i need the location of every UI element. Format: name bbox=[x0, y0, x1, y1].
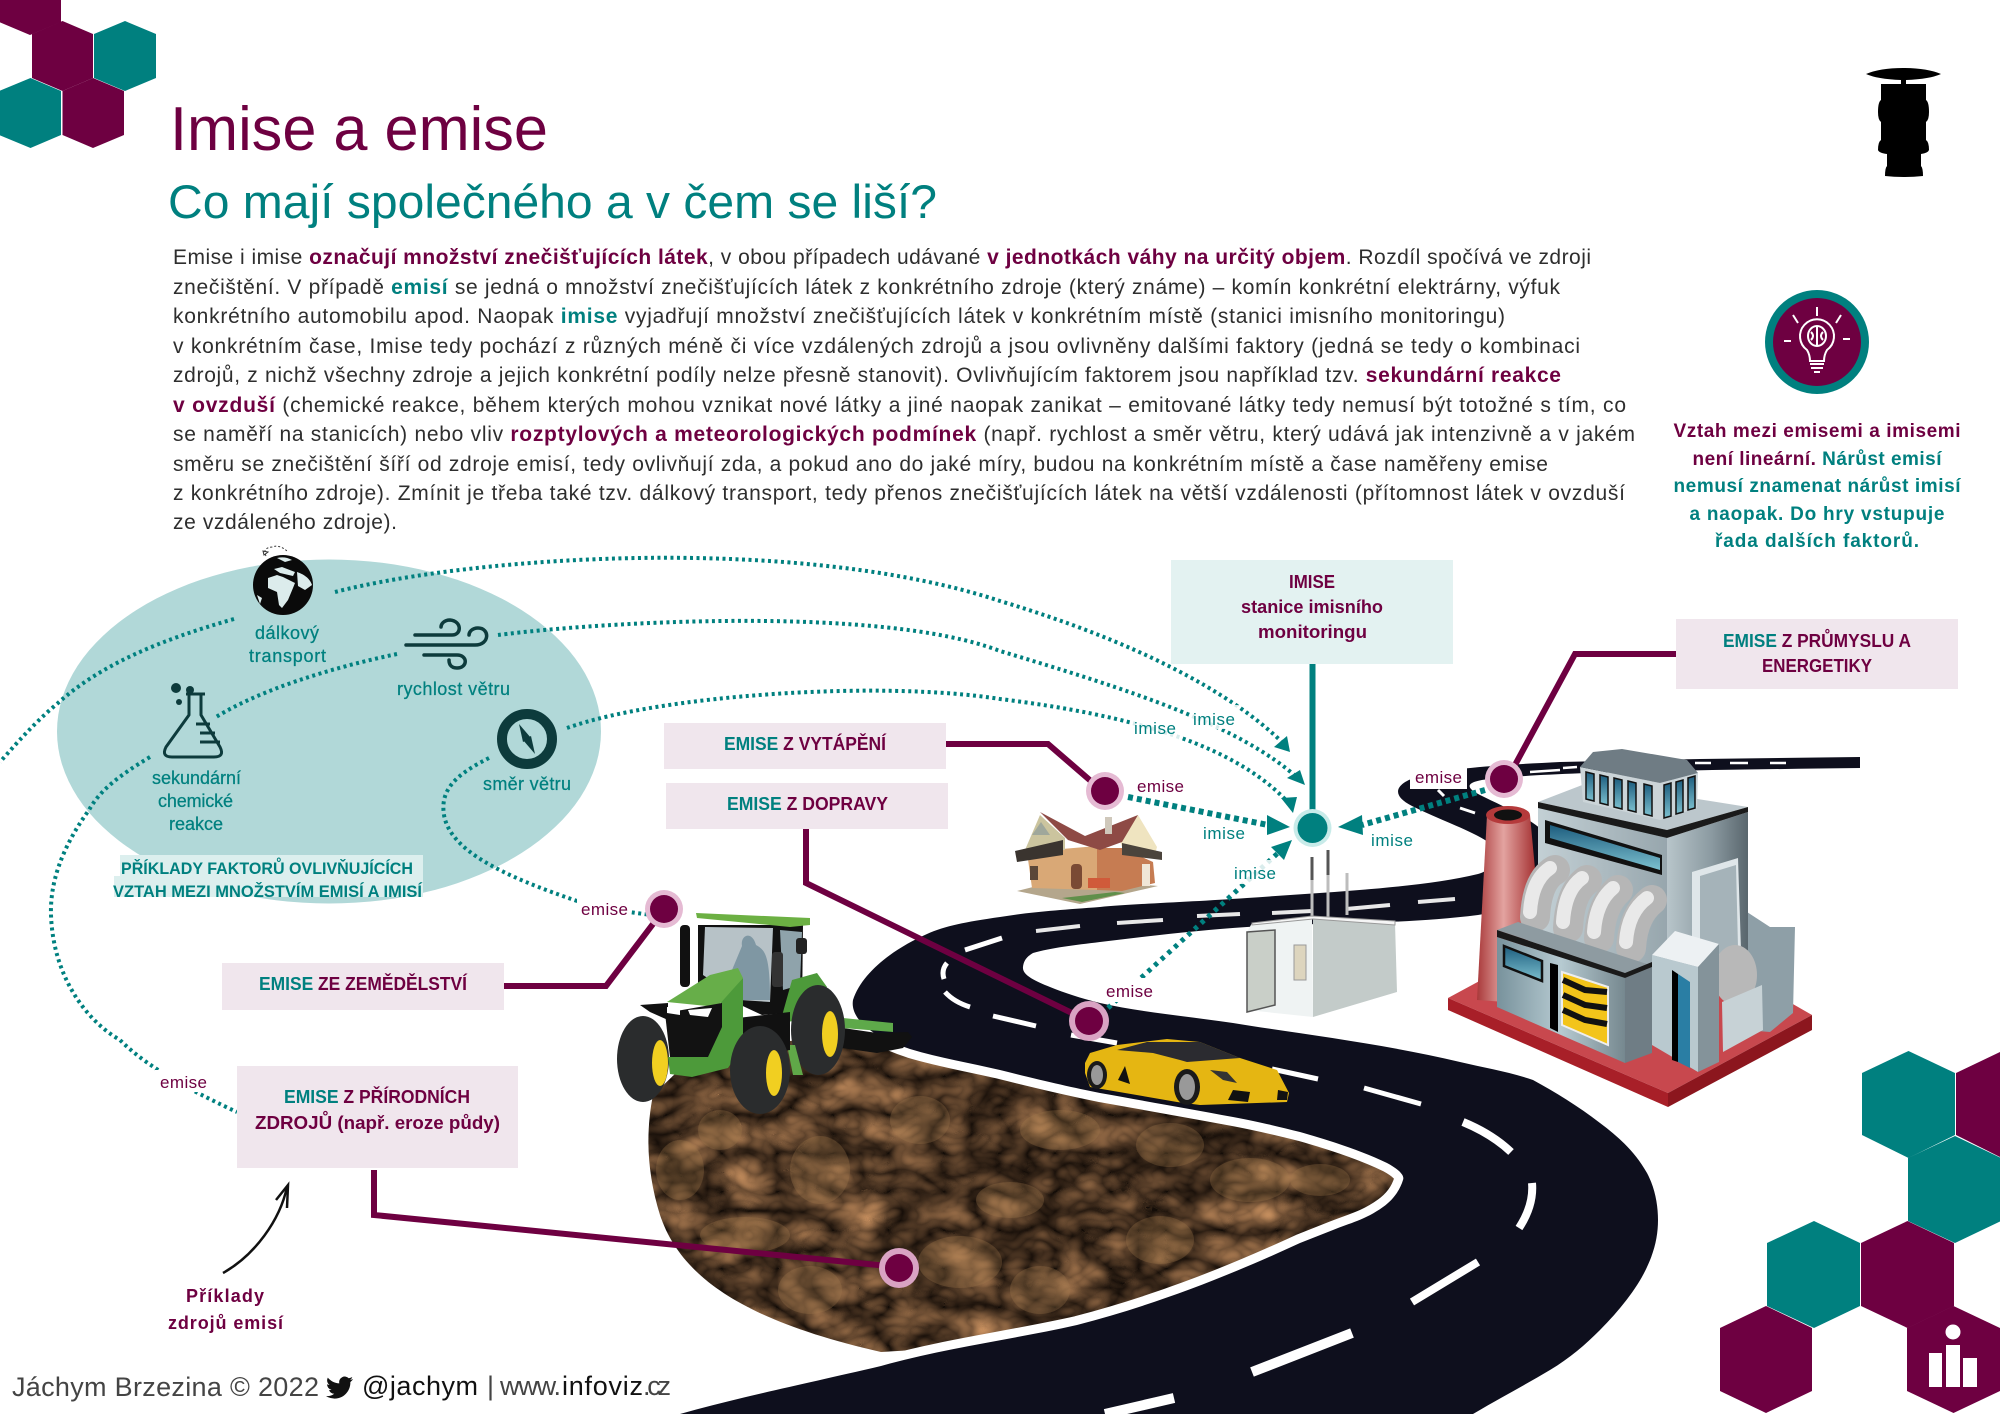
body text: ze vzdáleného zdroje). bbox=[173, 511, 397, 534]
body text bbox=[173, 246, 1635, 534]
door bbox=[1562, 972, 1608, 1045]
label: secondary reactions bbox=[152, 768, 241, 834]
label: secondary reactions: chemické bbox=[158, 791, 233, 811]
connector: agriculture bbox=[504, 920, 656, 986]
illustration: tractor bbox=[617, 913, 912, 1114]
caption: factors bbox=[113, 855, 423, 901]
callout: non-linear relation: nemusí znamenat nárůst imisí bbox=[1674, 476, 1961, 497]
box: industry emissions bbox=[1676, 619, 1958, 689]
body text: z konkrétního zdroje). Zmínit je třeba také tzv. dálkový transport, tedy přenos znečišťujících látek na větší vzdálenosti (přítomnost látek v ovzduší bbox=[173, 482, 1625, 505]
caption: factors: PŘÍKLADY FAKTORŮ OVLIVŇUJÍCÍCH bbox=[121, 858, 413, 878]
box: natural source emissions: ZDROJŮ (např. eroze půdy) bbox=[255, 1111, 500, 1133]
box: transport emissions bbox=[666, 783, 948, 829]
box: IMISE station: IMISE bbox=[1289, 572, 1335, 592]
body text: v konkrétním čase, Imise tedy pochází z různých méně či více vzdálených zdrojů a jsou ovlivněny dalšími faktory (jedná se tedy o kombinaci bbox=[173, 335, 1580, 358]
footer credit: @jachym bbox=[362, 1371, 478, 1401]
path: wind speed to station bbox=[498, 621, 1300, 780]
station connector bbox=[1310, 664, 1316, 815]
body text: v ovzduší (chemické reakce, během kterých mohou vznikat nové látky a jiné naopak zanikat – emitované látky tedy nemusí být totožné s tím, co bbox=[173, 394, 1626, 417]
label: wind direction: směr větru bbox=[483, 774, 571, 794]
callout: non-linear relation bbox=[1674, 421, 1961, 552]
marker: industry bbox=[1485, 760, 1523, 798]
body text: konkrétního automobilu apod. Naopak imise vyjadřují množství znečišťujících látek v konkrétním místě (stanici imisního monitoringu) bbox=[173, 305, 1505, 328]
arrowheads into station bbox=[1267, 736, 1363, 860]
illustration: car bbox=[1085, 1039, 1289, 1105]
body text: zdrojů, z nichž všechny zdroje a jejich konkrétní podíly nelze přesně stanovit). Ovlivňujícím faktorem jsou například tzv. sekundární reakce bbox=[173, 364, 1561, 387]
icon: flask bbox=[164, 683, 222, 757]
tall panel bbox=[1692, 858, 1741, 965]
title: Imise a emise bbox=[170, 95, 548, 164]
factory base bbox=[1448, 905, 1812, 1107]
path: wind direction to farm bbox=[443, 758, 651, 915]
marker: agriculture bbox=[645, 890, 683, 928]
labels: immission tags bbox=[1132, 705, 1413, 884]
box: industry emissions: ENERGETIKY bbox=[1762, 656, 1872, 676]
label: examples of emission sources bbox=[168, 1286, 284, 1333]
box: heating emissions bbox=[664, 723, 946, 769]
footer credit bbox=[12, 1371, 671, 1402]
box: natural source emissions bbox=[237, 1066, 518, 1168]
labels: emission tags: emise bbox=[1415, 768, 1462, 787]
road illustration bbox=[640, 757, 1860, 1414]
label: long-range transport: transport bbox=[249, 646, 326, 666]
icon: compass bbox=[502, 714, 552, 764]
icon: light bulb with brain bbox=[1765, 290, 1869, 394]
chimney bbox=[1477, 806, 1536, 1003]
labels: immission tags: imise bbox=[1203, 824, 1245, 843]
box: IMISE station: stanice imisního bbox=[1241, 597, 1383, 617]
illustration: factory bbox=[1448, 749, 1812, 1107]
box: agriculture emissions bbox=[222, 963, 504, 1010]
callout: non-linear relation: Vztah mezi emisemi a imisemi bbox=[1674, 421, 1960, 442]
marker: transport bbox=[1069, 1001, 1109, 1041]
footer credit: Jáchym Brzezina © 2022 bbox=[12, 1372, 319, 1402]
label: secondary reactions: sekundární bbox=[152, 768, 241, 788]
path: secondary reactions to natural sources bbox=[51, 757, 237, 1112]
icon: chimney silhouette bbox=[1866, 68, 1941, 177]
labels: emission tags: emise bbox=[1106, 982, 1153, 1001]
marker: heating bbox=[1086, 772, 1124, 810]
decorative hexagons bottom right bbox=[1720, 1051, 2000, 1413]
caption: factors: VZTAH MEZI MNOŽSTVÍM EMISÍ A IMISÍ bbox=[113, 882, 423, 901]
footer credit: | bbox=[487, 1371, 494, 1401]
label: examples of emission sources: Příklady bbox=[186, 1286, 264, 1306]
connector: transport bbox=[806, 829, 1080, 1017]
low box bbox=[1722, 985, 1763, 1052]
emission arrows bbox=[1108, 790, 1485, 1008]
footer credit: www. bbox=[499, 1371, 561, 1401]
back right block bbox=[1745, 912, 1795, 1032]
road surface bbox=[680, 757, 1860, 1414]
box: agriculture emissions: EMISE ZE ZEMĚDĚLSTVÍ bbox=[259, 973, 468, 994]
body text: znečištění. V případě emisí se jedná o množství znečišťujících látek z konkrétního zdroje (který známe) – komín konkrétní elektrárny, výfuk bbox=[173, 276, 1560, 299]
label: examples of emission sources: zdrojů emisí bbox=[168, 1313, 284, 1333]
labels: emission tags bbox=[155, 763, 1467, 1092]
window strip bbox=[1545, 820, 1662, 875]
connector: natural bbox=[374, 1170, 888, 1266]
body text: směru se znečištění šíří od zdroje emisí, tedy ovlivňují zda, a pokud ano do jaké míry, budou na konkrétním místě a čase naměřeny emise bbox=[173, 453, 1548, 476]
callout: non-linear relation: a naopak. Do hry vstupuje bbox=[1690, 504, 1944, 525]
decorative hexagons top left bbox=[0, 0, 156, 148]
connector: heating bbox=[946, 744, 1092, 782]
labels: immission tags: imise bbox=[1234, 864, 1276, 883]
box: industry emissions: EMISE Z PRŮMYSLU A bbox=[1723, 629, 1911, 651]
main tower bbox=[1538, 806, 1667, 1000]
box: IMISE station: monitoringu bbox=[1258, 622, 1367, 642]
dotted factor paths bbox=[0, 558, 1300, 1112]
icon: wind bbox=[406, 620, 487, 668]
lower block bbox=[1497, 937, 1625, 1063]
illustration: monitoring station bbox=[1247, 850, 1397, 1017]
body text: Emise i imise označují množství znečišťujících látek, v obou případech udávané v jednotkách váhy na určitý objem. Rozdíl spočívá ve zdroji bbox=[173, 246, 1591, 269]
callout: non-linear relation: není lineární. Nárůst emisí bbox=[1692, 449, 1942, 470]
icon: globe bbox=[253, 546, 313, 615]
arrow: to emission sources bbox=[223, 1185, 288, 1273]
footer credit: infoviz bbox=[562, 1371, 643, 1401]
panel: factors ellipse bbox=[57, 560, 601, 904]
labels: emission tags: emise bbox=[160, 1073, 207, 1092]
subtitle: Co mají společného a v čem se liší? bbox=[168, 175, 937, 228]
icon: twitter bird bbox=[326, 1377, 353, 1399]
icon: infoviz logo bbox=[1929, 1324, 1977, 1387]
road dashes bbox=[943, 763, 1786, 1414]
footer credit: .cz bbox=[643, 1371, 671, 1401]
path: long-range transport to station bbox=[335, 558, 1285, 745]
connector: industry bbox=[1515, 654, 1676, 765]
box: transport emissions: EMISE Z DOPRAVY bbox=[727, 794, 888, 814]
front tower bbox=[1652, 931, 1719, 967]
labels: emission tags: emise bbox=[1137, 777, 1184, 796]
labels: immission tags: imise bbox=[1193, 710, 1235, 729]
body text: se naměří na stanicích) nebo vliv rozptylových a meteorologických podmínek (např. rychlost a směr větru, který udává jak intenzivně a v jakém bbox=[173, 423, 1635, 446]
label: long-range transport: dálkový bbox=[255, 623, 319, 643]
label: secondary reactions: reakce bbox=[169, 814, 223, 834]
small dome bbox=[1713, 945, 1757, 1005]
illustration: house bbox=[1015, 812, 1162, 904]
labels: immission tags: imise bbox=[1134, 719, 1176, 738]
marker: soil bbox=[879, 1248, 919, 1288]
labels: immission tags: imise bbox=[1371, 831, 1413, 850]
box: heating emissions: EMISE Z VYTÁPĚNÍ bbox=[724, 733, 887, 754]
labels: emission tags: emise bbox=[581, 900, 628, 919]
head block bbox=[1580, 767, 1698, 820]
marker: station bbox=[1294, 809, 1332, 847]
path: wind direction to station bbox=[567, 691, 1293, 808]
callout: non-linear relation: řada dalších faktorů. bbox=[1715, 531, 1919, 552]
box: IMISE station bbox=[1171, 560, 1453, 664]
label: wind speed: rychlost větru bbox=[397, 679, 510, 699]
label: long-range transport bbox=[249, 623, 326, 666]
hood vents bbox=[1530, 868, 1652, 948]
soil field bbox=[648, 1040, 1394, 1352]
box: natural source emissions: EMISE Z PŘÍRODNÍCH bbox=[284, 1086, 470, 1107]
